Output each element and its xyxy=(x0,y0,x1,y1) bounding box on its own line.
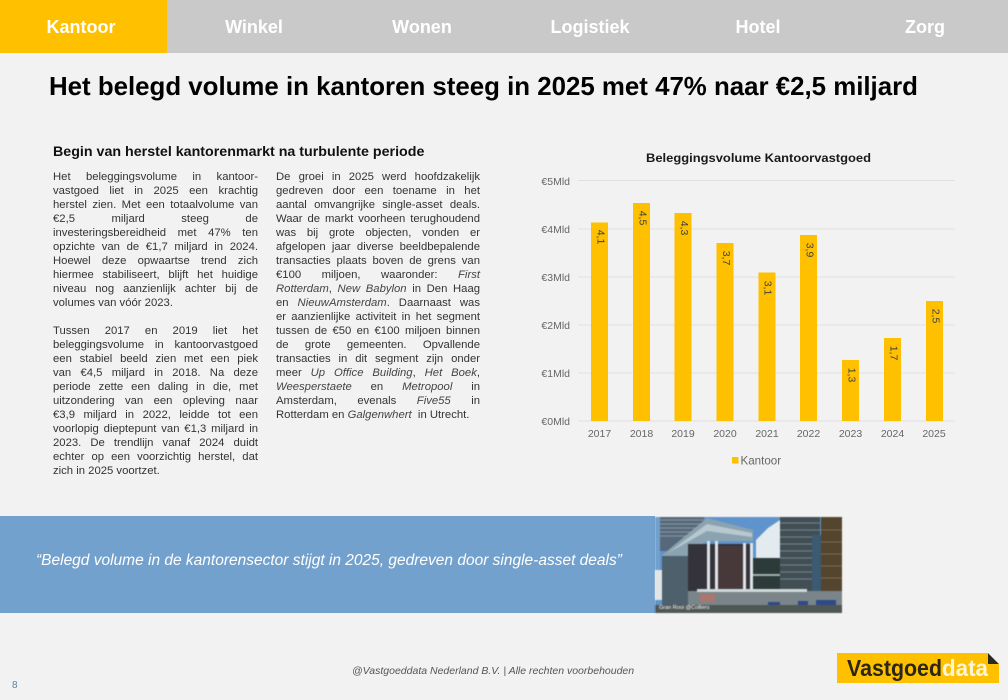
far right tower xyxy=(821,517,842,601)
text column right: Amsterdam, evenals Five55 in xyxy=(276,395,480,407)
tab: Zorg: Zorg xyxy=(905,17,945,37)
text column left: een stabiel beeld zien met een piek xyxy=(53,353,258,365)
main building xyxy=(662,555,688,605)
tab: Winkel: Winkel xyxy=(225,17,283,37)
text column left: volumes van vóór 2023. xyxy=(53,297,173,309)
text column left: €3,9 miljard in 2022, leidde tot een xyxy=(53,409,258,421)
text column left: zich in 2025 voortzet. xyxy=(53,465,160,477)
lower right block xyxy=(753,558,781,592)
tab: Wonen: Wonen xyxy=(392,17,452,37)
bar value labels: 1,7 xyxy=(888,346,900,360)
text column right: afgelopen jaar diverse beeldbepalende xyxy=(276,241,480,253)
text column right: aantal omvangrijke single-asset deals. xyxy=(276,199,480,211)
bar value labels: 4,3 xyxy=(678,221,690,235)
x axis labels: 2017 xyxy=(588,428,611,440)
x axis labels: 2025 xyxy=(922,428,946,440)
bar value labels: 3,7 xyxy=(720,251,732,265)
x axis labels: 2019 xyxy=(671,428,695,440)
text column left: echter op een voorzichtig herstel, dat xyxy=(53,451,258,463)
y axis labels: €2Mld xyxy=(541,320,570,332)
y axis labels xyxy=(541,176,570,428)
bar value labels: 2,5 xyxy=(930,309,942,323)
text column right: er aanzienlijke activiteit in het segment xyxy=(276,311,480,323)
text column left: opzichte van de €1,7 miljard in 2024. xyxy=(53,241,258,253)
tab: Logistiek: Logistiek xyxy=(550,17,630,37)
logo: Vastgoeddata xyxy=(837,653,999,683)
bar value labels: 3,1 xyxy=(762,281,774,295)
y axis labels: €1Mld xyxy=(541,368,570,380)
text column left: periode zette een daling in die, met xyxy=(53,381,258,393)
x axis labels: 2021 xyxy=(755,428,779,440)
x axis labels xyxy=(588,428,946,440)
text column left: Het beleggingsvolume in kantoor- xyxy=(53,171,258,183)
tab label: Kantoor: Kantoor xyxy=(46,17,116,37)
text column right: en NieuwAmsterdam. Daarnaast was xyxy=(276,297,480,309)
y axis labels: €0Mld xyxy=(541,416,570,428)
right tower xyxy=(780,517,820,595)
active tab: Kantoor xyxy=(0,0,167,53)
text column left: hiermee stabiliseert, blijft het huidige xyxy=(53,269,258,281)
quote banner xyxy=(0,516,655,613)
logo: Vastgoeddata: data xyxy=(942,655,989,681)
text column left xyxy=(53,171,258,477)
text column left: beleggingsvolume in kantoorvastgoed xyxy=(53,339,258,351)
title: Het belegd volume in kantoren steeg in 2025 met 47% naar €2,5 miljard xyxy=(49,73,918,101)
text column left: uitzondering van een opleving naar xyxy=(53,395,258,407)
x axis labels: 2024 xyxy=(881,428,904,440)
text column right: Weesperstaete en Metropool in xyxy=(276,381,480,393)
text column right: tussen de €50 en €100 miljoen binnen xyxy=(276,325,480,337)
text column left: herstel zien. Met een totaalvolume van xyxy=(53,199,258,211)
footer copyright: @Vastgoeddata Nederland B.V. | Alle rechten voorbehouden xyxy=(352,665,634,677)
text column right: De groei in 2025 werd hoofdzakelijk xyxy=(276,171,480,183)
photo credit: Gran Rooi @Colliers xyxy=(659,605,710,611)
text column left: van €4,5 miljard in 2018. Na deze xyxy=(53,367,258,379)
x axis labels: 2018 xyxy=(630,428,653,440)
text column left: niveau nog aanzienlijk achter bij de xyxy=(53,283,258,295)
text column left: voorlopig dieptepunt van €1,3 miljard in xyxy=(53,423,258,435)
text column left: investeringsbereidheid met 47% ten xyxy=(53,227,258,239)
text column right: transacties plaats boven de grens van xyxy=(276,255,480,267)
text column left: Hoewel deze opwaartse trend zich xyxy=(53,255,258,267)
quote text: “Belegd volume in de kantorensector stijgt in 2025, gedreven door single-asset deals” xyxy=(36,552,622,569)
y axis labels: €3Mld xyxy=(541,272,570,284)
x axis labels: 2023 xyxy=(839,428,862,440)
legend: Kantoor xyxy=(740,454,781,468)
tab: Hotel: Hotel xyxy=(736,17,780,37)
text column right: gedreven door een toename in het xyxy=(276,185,480,197)
text column right: de grote gemeenten. Opvallende xyxy=(276,339,480,351)
text column right: transacties in dit segment zijn onder xyxy=(276,353,480,365)
bar value labels: 4,1 xyxy=(594,230,606,244)
text column left: €2,5 miljard steeg de xyxy=(53,213,258,225)
text column left: 2023. De trendlijn vanaf 2024 duidt xyxy=(53,437,258,449)
text column right: €100 miljoen, waaronder: First xyxy=(276,269,480,281)
bar value labels xyxy=(594,211,942,382)
street level xyxy=(688,591,842,605)
text column right: was bij grote objecten, vonden er xyxy=(276,227,480,239)
text column right: Rotterdam, New Babylon in Den Haag xyxy=(276,283,480,295)
y axis labels: €4Mld xyxy=(541,224,570,236)
y axis labels: €5Mld xyxy=(541,176,570,188)
bar value labels: 1,3 xyxy=(846,368,858,382)
navigation bar xyxy=(0,0,1008,53)
text column right: Waar de markt voorheen terughoudend xyxy=(276,213,480,225)
text column right xyxy=(276,171,480,421)
page number: 8 xyxy=(12,680,18,691)
bars xyxy=(591,203,943,421)
section heading: Begin van herstel kantorenmarkt na turbulente periode xyxy=(53,144,424,160)
text column right: Rotterdam en Galgenwhert in Utrecht. xyxy=(276,409,469,421)
bar value labels: 3,9 xyxy=(804,243,816,257)
bar value labels: 4,5 xyxy=(636,211,648,225)
logo: Vastgoeddata: Vastgoed xyxy=(847,655,942,681)
text column right: meer Up Office Building, Het Boek, xyxy=(276,367,480,379)
text column left: Tussen 2017 en 2019 liet het xyxy=(53,325,258,337)
text column left: vastgoed liet in 2025 een krachtig xyxy=(53,185,258,197)
bar chart: Beleggingsvolume Kantoorvastgoed xyxy=(541,151,955,468)
x axis labels: 2020 xyxy=(713,428,737,440)
left tower xyxy=(660,517,704,551)
x axis labels: 2022 xyxy=(797,428,820,440)
photo: office building xyxy=(654,516,843,614)
chart title: Beleggingsvolume Kantoorvastgoed xyxy=(646,151,871,165)
